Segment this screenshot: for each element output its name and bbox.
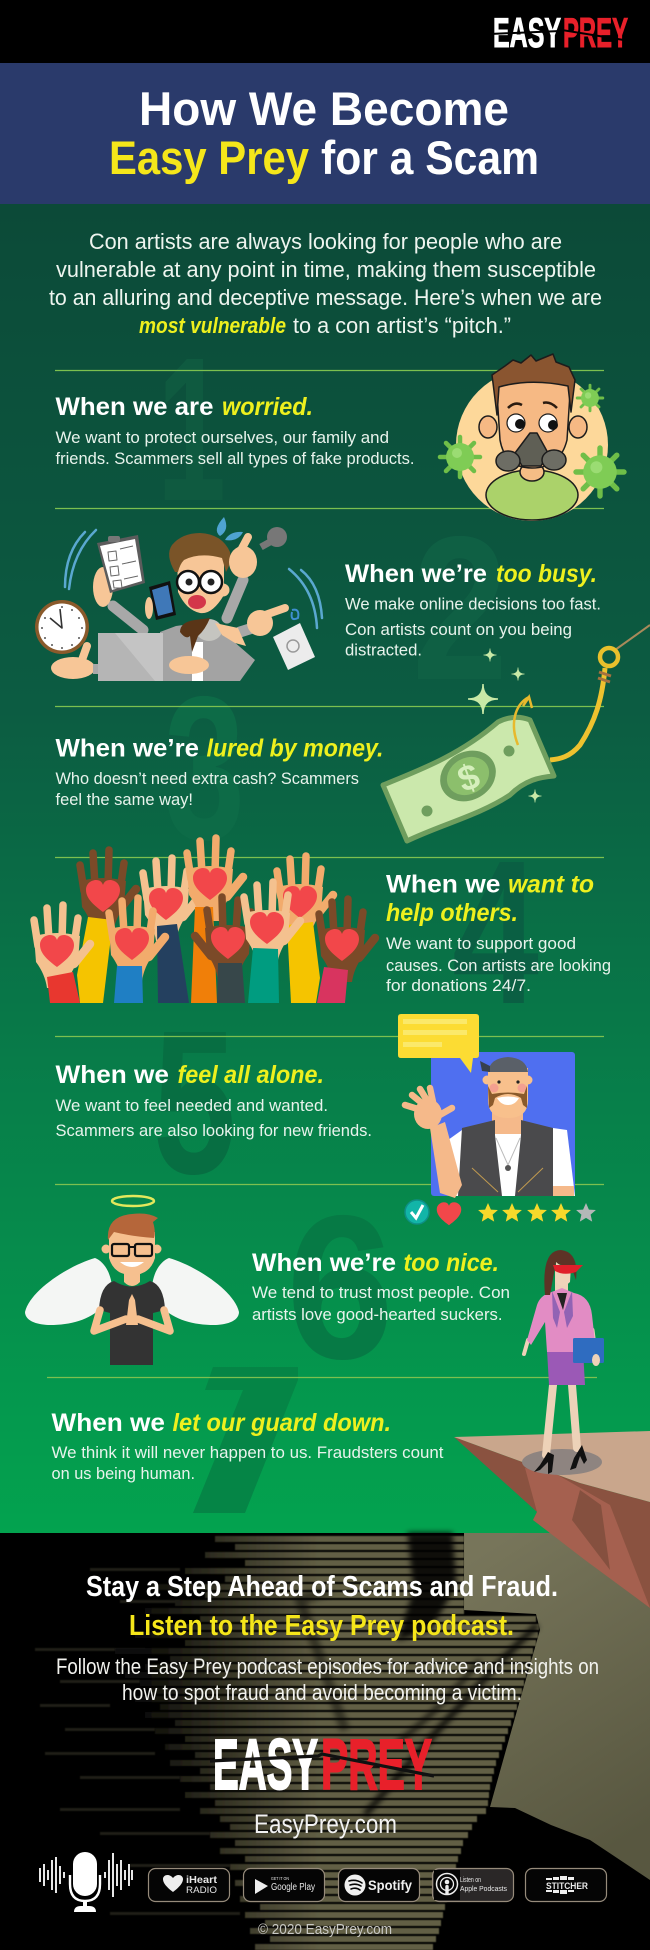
- title banner: Easy Prey: [109, 131, 309, 184]
- illustration: man in gas mask with viruses: [440, 354, 624, 521]
- badge: Stitcher: STITCHER: [546, 1881, 588, 1891]
- panel: lured by money: [56, 625, 650, 841]
- text: feel all alone: Scammers are also looking for new friends.: [56, 1122, 372, 1140]
- footer text: how to spot fraud and avoid becoming a victim.: [122, 1680, 522, 1705]
- title banner: [0, 63, 650, 204]
- intro text: vulnerable at any point in time, making them susceptible: [56, 257, 596, 282]
- heading: lured by money: lured by money.: [206, 734, 384, 762]
- logo: Easy Prey header: EASY: [493, 9, 561, 56]
- heading: worried: [56, 393, 313, 421]
- heading: feel all alone: feel all alone.: [178, 1061, 324, 1089]
- text: guard down: [52, 1444, 444, 1483]
- illustration: busy office worker: [35, 517, 322, 681]
- text: too busy: [345, 596, 601, 660]
- footer heading: Listen to the Easy Prey podcast.: [129, 1610, 514, 1642]
- title banner: for a Scam: [321, 131, 539, 184]
- speech bubble: [398, 1014, 479, 1073]
- text: lured by money: [56, 770, 359, 809]
- green background: [0, 204, 650, 1533]
- badge: Apple Podcasts: Apple Podcasts: [460, 1884, 507, 1893]
- footer panel: [0, 1533, 650, 1950]
- badge: Apple Podcasts: [432, 1868, 514, 1902]
- intro text: Con artists are always looking for people who are: [89, 229, 562, 254]
- logo: Easy Prey footer: EASY: [213, 1726, 318, 1805]
- illustration: angel with wings and halo: [25, 1196, 239, 1365]
- badge: Google Play: GET IT ON: [271, 1876, 289, 1881]
- text: lured by money: feel the same way!: [56, 791, 193, 809]
- text: help others: for donations 24/7.: [386, 977, 531, 995]
- text: guard down: on us being human.: [52, 1465, 195, 1483]
- heading: lured by money: When we’re: [56, 734, 199, 762]
- heading: worried: When we are: [56, 393, 214, 421]
- heading: too nice: too nice.: [404, 1249, 499, 1277]
- icon: microphone with sound waves: [40, 1852, 132, 1912]
- big number 6: 6: [286, 1173, 394, 1402]
- heading: guard down: When we: [52, 1409, 165, 1437]
- badge: Stitcher: [526, 1868, 606, 1902]
- text: too nice: artists love good-hearted suckers.: [252, 1306, 502, 1324]
- text: guard down: We think it will never happen to us. Fraudsters count: [52, 1444, 444, 1462]
- intro text: most vulnerable: [139, 313, 286, 338]
- illustration: dollar bill on fish hook: $: [452, 755, 485, 800]
- big number 4: 4: [452, 818, 539, 1047]
- illustration: raised hands holding hearts: [34, 838, 375, 1003]
- heading: too busy: too busy.: [496, 560, 597, 588]
- text: feel all alone: [56, 1097, 372, 1140]
- heading: help others: want to: [508, 870, 594, 898]
- logo: Easy Prey footer: PREY: [321, 1726, 432, 1805]
- heading: too nice: [252, 1249, 499, 1277]
- heading: too busy: When we’re: [345, 560, 487, 588]
- text: too nice: We tend to trust most people. Con: [252, 1284, 510, 1302]
- text: too busy: We make online decisions too fast.: [345, 596, 601, 614]
- footer heading: Stay a Step Ahead of Scams and Fraud.: [86, 1571, 558, 1603]
- illustration: fake online profile biker: [398, 1014, 596, 1225]
- panel: too nice: [25, 1196, 510, 1365]
- big number 3: 3: [164, 654, 245, 883]
- intro text: to a con artist’s “pitch.”: [293, 313, 511, 338]
- heading: too busy: [345, 560, 597, 588]
- footer background silhouette: [0, 1533, 650, 1950]
- big number 2: 2: [412, 494, 508, 723]
- badge: Google Play: [244, 1868, 324, 1902]
- intro text: to an alluring and deceptive message. Here’s when we are: [49, 285, 602, 310]
- panel: worried: [56, 354, 624, 521]
- big number 5: 5: [153, 988, 236, 1217]
- badge: iHeart Radio: RADIO: [186, 1885, 217, 1896]
- big number 1: 1: [157, 315, 226, 544]
- heading: feel all alone: [56, 1061, 324, 1089]
- panel: help others: [34, 838, 611, 1003]
- footer text: [56, 1654, 599, 1705]
- text: help others: causes. Con artists are looking: [386, 957, 611, 975]
- text: too busy: Con artists count on you being: [345, 621, 572, 639]
- heading: worried: worried.: [222, 393, 313, 421]
- illustration: blindfolded woman at cliff edge: [524, 1250, 604, 1474]
- text: feel all alone: We want to feel needed and wanted.: [56, 1097, 328, 1115]
- text: too nice: [252, 1284, 510, 1324]
- big number 7: [193, 1367, 298, 1513]
- icons: verified, heart and star rating: [405, 1200, 596, 1225]
- title banner: How We Become: [139, 82, 509, 135]
- footer heading: [86, 1571, 558, 1642]
- text: too busy: distracted.: [345, 642, 422, 660]
- text: lured by money: Who doesn’t need extra cash? Scammers: [56, 770, 359, 788]
- heading: help others: help others.: [386, 899, 518, 927]
- heading: help others: [386, 870, 594, 927]
- badge: Apple Podcasts: Listen on: [460, 1877, 481, 1884]
- heading: guard down: [52, 1409, 391, 1437]
- text: help others: We want to support good: [386, 935, 576, 953]
- badge: iHeart Radio: iHeart: [186, 1875, 218, 1886]
- copyright: © 2020 EasyPrey.com: [258, 1921, 392, 1938]
- heading: lured by money: [56, 734, 384, 762]
- top bar background: [0, 0, 650, 63]
- text: worried: We want to protect ourselves, our family and: [56, 429, 389, 447]
- intro text: [49, 229, 602, 338]
- panel: feel all alone: [56, 1014, 596, 1225]
- heading: too nice: When we’re: [252, 1249, 396, 1277]
- illustration: dollar bill on fish hook: [383, 625, 650, 841]
- panel: too busy: [35, 517, 601, 681]
- illustration: cliff edge: [454, 1431, 650, 1608]
- heading: guard down: let our guard down.: [172, 1409, 391, 1437]
- badge: Google Play: Google Play: [271, 1882, 315, 1893]
- website link: EasyPrey.com: [254, 1809, 397, 1839]
- heading: help others: When we: [386, 870, 501, 898]
- text: worried: friends. Scammers sell all types of fake products.: [56, 450, 414, 468]
- text: help others: [386, 935, 611, 995]
- badge: iHeart Radio: [148, 1868, 230, 1902]
- badge: Spotify: [338, 1868, 420, 1902]
- heading: feel all alone: When we: [56, 1061, 169, 1089]
- panel: let our guard down: [52, 1250, 650, 1608]
- text: worried: [56, 429, 414, 468]
- badge: Spotify: Spotify: [368, 1877, 412, 1893]
